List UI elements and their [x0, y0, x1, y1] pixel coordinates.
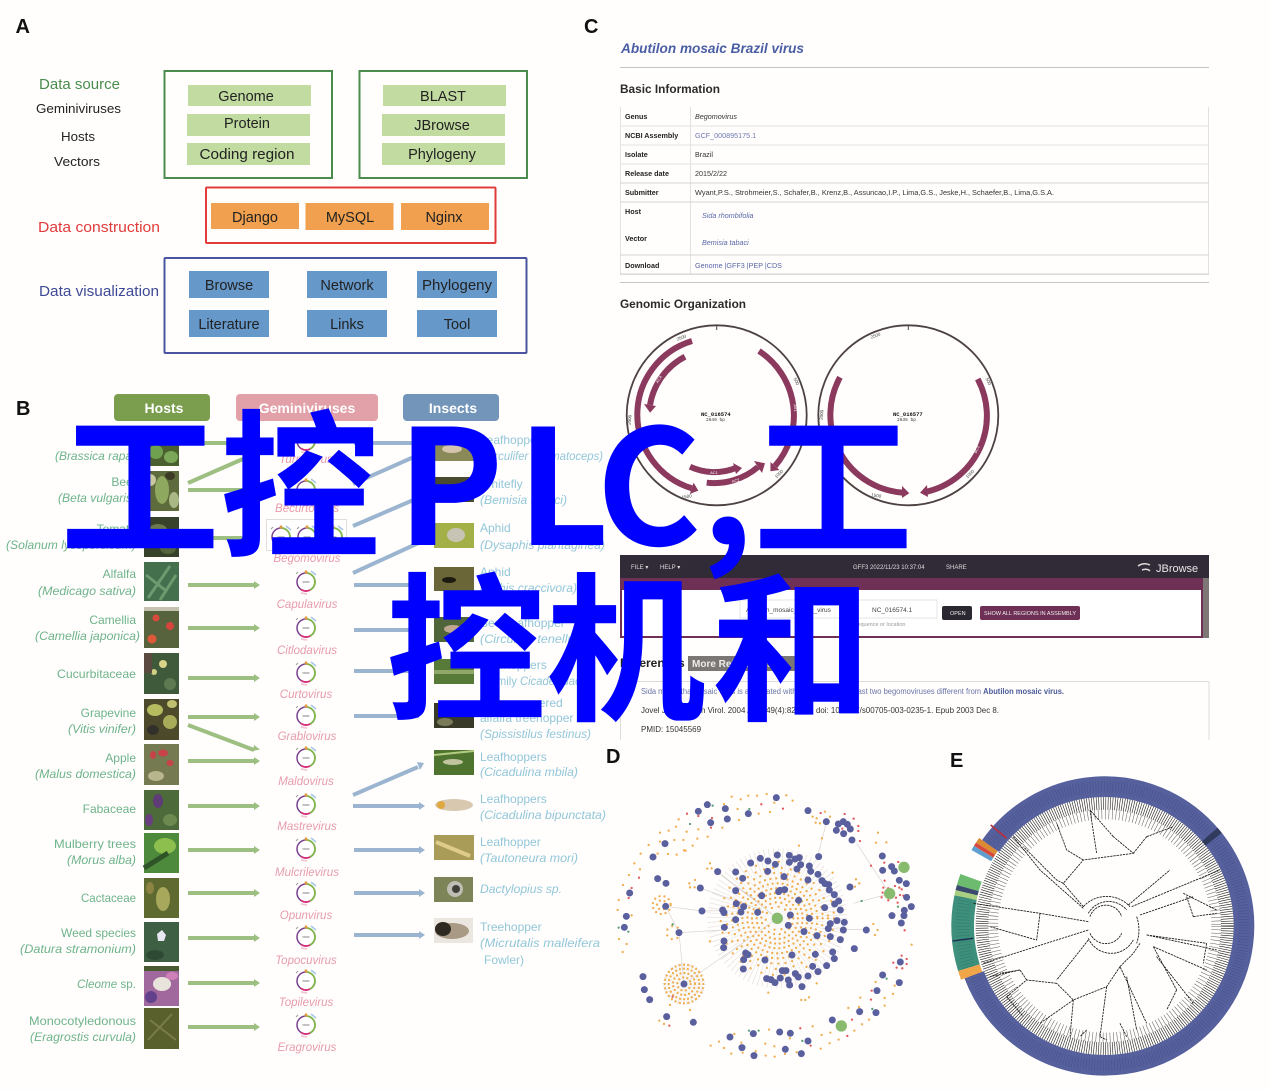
tree branches: [973, 810, 1220, 1040]
insect labels: Fowler): [484, 953, 524, 967]
host labels: Grapevine: [81, 706, 136, 720]
watermark line 2: 控机和: [386, 523, 872, 755]
host labels: Cleome sp.: [77, 977, 136, 991]
references section: PMID: 15045569: [641, 725, 702, 734]
host labels: Monocotyledonous: [29, 1014, 136, 1028]
host labels: (Eragrostis curvula): [30, 1030, 136, 1044]
red nodes: [629, 804, 907, 1046]
host labels: (Morus alba): [67, 853, 136, 867]
column header: Insects: [403, 394, 499, 421]
host labels: Beet: [111, 475, 137, 489]
insect labels: Leafhopper: [480, 433, 541, 447]
insect labels: (Circulifer tenellus): [480, 632, 585, 646]
basic information table: Isolate: [625, 150, 648, 159]
insect labels: Three-cornered: [480, 696, 563, 710]
genome map: NC_016574: 1000: [774, 468, 785, 479]
basic information table: Genus: [625, 112, 647, 121]
data source labels: [36, 76, 122, 169]
geminivirus genus names: Turnovirus: [279, 454, 333, 466]
data source box: genomic data: Genome: [218, 89, 274, 105]
insect labels: Leafhoppers: [480, 750, 547, 764]
geminivirus genus names: Becurtovirus: [275, 503, 339, 515]
host labels: Camellia: [89, 613, 136, 627]
title rule: [620, 67, 1209, 68]
insect labels: Leafhoppers: [480, 792, 547, 806]
host labels: Tomato: [97, 522, 136, 536]
genome map: NC_016577: NC_016577: [893, 411, 923, 418]
insect labels: (Tautoneura mori): [480, 851, 578, 865]
basic information heading: Basic Information: [620, 82, 720, 96]
host photos: [144, 437, 179, 1049]
insect labels: Beet leafhopper: [480, 616, 565, 630]
geminivirus genus names: Begomovirus: [273, 553, 341, 565]
JBrowse viewer screenshot: SHOW ALL REGIONS IN ASSEMBLY: [984, 611, 1077, 617]
data construction box: MySQL: [326, 210, 374, 226]
geminivirus genus names: Capulavirus: [277, 599, 338, 611]
insect photos: [434, 440, 474, 943]
JBrowse viewer screenshot: Abutilon_mosaic_Brazil_virus: [746, 607, 832, 614]
geminivirus genus names: Mulcrilevirus: [275, 867, 339, 879]
insect labels: (Dysaphis plantaginea): [480, 538, 605, 552]
column header: Insects: Insects: [429, 400, 477, 416]
host labels: Fabaceae: [83, 802, 136, 816]
JBrowse viewer screenshot: GFF3 2022/11/23 10:37:04: [853, 565, 925, 571]
geminivirus genus names: Mastrevirus: [277, 821, 337, 833]
JBrowse viewer screenshot: HELP ▾: [660, 565, 680, 571]
geminivirus genus names: [273, 454, 341, 1054]
host labels: (Camellia japonica): [35, 629, 140, 643]
green host hub nodes: [772, 862, 910, 1032]
JBrowse viewer screenshot: NC_016574.1: [872, 607, 912, 614]
data visualization box: Browse: [205, 278, 253, 294]
host labels: (Solanum lycopersicum): [6, 538, 136, 552]
host labels: (Datura stramonium): [20, 942, 136, 956]
orange leaf nodes around hubs: [653, 862, 834, 1003]
data source labels: Geminiviruses: [36, 101, 122, 116]
host labels: (Brassica rapa): [55, 449, 136, 463]
basic information table: Bemisia tabaci: [702, 238, 749, 247]
host labels: [6, 433, 140, 1044]
column header: Hosts: [114, 394, 210, 421]
green and teal small nodes: [619, 806, 898, 1041]
insect labels: Dactylopius sp.: [480, 882, 562, 896]
genome map: NC_016577: 1000: [965, 468, 976, 479]
insect labels: Whitefly: [480, 477, 523, 491]
data source labels: Vectors: [54, 154, 101, 169]
basic information table: NCBI Assembly: [625, 131, 678, 140]
basic information table: Brazil: [695, 150, 713, 159]
references section: [620, 656, 1209, 740]
data visualization label: Data visualization: [39, 283, 159, 300]
panel E: circular phylogenetic tree: [953, 787, 1244, 1065]
panel D: interaction network: [618, 794, 915, 1059]
genome map: NC_016574: AV1: [793, 404, 798, 412]
insect labels: Leafhopper: [480, 835, 541, 849]
dark ticks on ring: [974, 787, 1244, 1065]
genome map: NC_016574: 1500: [681, 493, 693, 500]
green arrows: hosts to viruses: [188, 443, 260, 1031]
data source box: tools: [360, 71, 527, 178]
insect labels: alfalfa treehopper: [480, 711, 573, 725]
data source box: genomic data: [164, 71, 332, 178]
insect labels: Treehopper: [480, 920, 542, 934]
data source labels: Hosts: [61, 129, 96, 144]
virus title: Abutilon mosaic Brazil virus: [620, 40, 804, 56]
panel letter E: E: [950, 750, 963, 772]
insect labels: (Aphis craccivora): [480, 581, 577, 595]
orange outer nodes: [618, 794, 912, 1057]
host labels: Mulberry trees: [54, 837, 136, 851]
panel letter A: A: [16, 16, 30, 38]
basic information table: GCF_000895175.1: [695, 131, 756, 140]
JBrowse viewer screenshot: SHARE: [946, 565, 967, 571]
panel C: virus detail page: [584, 16, 1209, 740]
genome map: NC_016577: 1500: [871, 492, 882, 499]
data construction box: Nginx: [425, 210, 463, 226]
data construction label: Data construction: [38, 219, 160, 236]
genome map: NC_016577: [818, 325, 998, 505]
host labels: (Medicago sativa): [38, 584, 136, 598]
genome map: NC_016574: AC1: [710, 470, 719, 475]
insect labels: (Micrutalis malleifera: [480, 936, 600, 950]
basic information table: Vector: [625, 234, 647, 243]
data construction box: Django: [232, 210, 278, 226]
genome map: NC_016574: 2500: [676, 333, 687, 342]
basic information table: Submitter: [625, 188, 659, 197]
blue arrows: viruses to insects: [353, 443, 425, 939]
insect labels: (Spissistilus festinus): [480, 727, 591, 741]
host labels: (Vitis vinifer): [68, 722, 136, 736]
table rule: [620, 282, 1209, 283]
genome map: NC_016574: 2649 bp: [706, 417, 725, 423]
geminivirus genus names: Curtovirus: [280, 689, 332, 701]
geminivirus genome maps: [266, 430, 346, 1037]
main blue annotation ring: [974, 787, 1244, 1065]
host labels: Weed species: [61, 926, 136, 940]
geminivirus genus names: Citlodavirus: [277, 645, 337, 657]
geminivirus genus names: Topilevirus: [279, 997, 334, 1009]
data source box: tools: Phylogeny: [408, 147, 477, 163]
JBrowse viewer screenshot: [620, 555, 1209, 638]
host labels: Cucurbitaceae: [57, 667, 136, 681]
basic information table: Sida rhombifolia: [702, 211, 754, 220]
data visualization box: Links: [330, 317, 364, 333]
host labels: (Beta vulgaris): [58, 491, 136, 505]
references section: Sida micrantha mosaic virus is associated with a complex of at least two begomoviruses different from Abutilon mosaic virus.: [641, 687, 1064, 696]
data visualization box: Literature: [198, 317, 260, 333]
genome map: NC_016577: 2500: [870, 331, 882, 340]
insect labels: [480, 433, 606, 967]
genome map: NC_016574: NC_016574: [701, 411, 731, 418]
geminivirus genus names: Eragrovirus: [278, 1042, 337, 1054]
JBrowse viewer screenshot: Enter sequence or location: [840, 622, 905, 628]
genome map: NC_016574: AC2: [731, 477, 741, 484]
data source labels: Data source: [39, 76, 120, 93]
genome map: NC_016574: 500: [793, 377, 800, 386]
blue virus nodes: [621, 794, 915, 1059]
references section: Jovel J, et al. Arch Virol. 2004 Apr;149(4):829-41. doi: 10.1007/s00705-003-0235-1. Epub 2003 Dec 8.: [641, 706, 999, 715]
geminivirus genus names: Topocuvirus: [275, 955, 337, 967]
data construction box: [206, 188, 496, 243]
basic information table: Begomovirus: [695, 112, 737, 121]
panel A: database architecture: [16, 16, 527, 353]
host labels: Cactaceae: [81, 891, 136, 905]
coloured clade bands: [953, 825, 1214, 976]
JBrowse viewer screenshot: JBrowse: [1156, 563, 1198, 575]
insect labels: (Family Cicadellidae): [480, 674, 585, 688]
genome map: NC_016574: 2000: [627, 414, 632, 425]
genome map: NC_016577: 2635 bp: [897, 417, 916, 423]
JBrowse viewer screenshot: FILE ▾: [631, 565, 648, 571]
data source box: genomic data: Protein: [224, 116, 270, 132]
host labels: Apple: [105, 751, 136, 765]
insect labels: (Circulifer haematoceps): [480, 449, 603, 463]
basic information table: Download: [625, 261, 659, 270]
data visualization box: Tool: [444, 317, 470, 333]
column header: Geminiviruses: Geminiviruses: [259, 400, 355, 416]
references section: References: [620, 656, 685, 670]
data source box: tools: JBrowse: [414, 118, 470, 134]
host labels: Turnip: [102, 433, 136, 447]
data source box: tools: BLAST: [420, 89, 466, 105]
watermark line 1: 工控PLC,工: [60, 360, 913, 592]
genomic organization heading: Genomic Organization: [620, 297, 746, 311]
basic information table: Host: [625, 207, 642, 216]
network edges: [666, 822, 890, 995]
genome map: NC_016577: BC1: [973, 444, 981, 454]
insect labels: (Cicadulina bipunctata): [480, 808, 606, 822]
panel letter C: C: [584, 16, 598, 38]
panel B: hosts, geminiviruses, insects: [6, 394, 606, 1054]
data visualization box: Phylogeny: [422, 278, 493, 294]
insect labels: Leafhoppers: [480, 658, 547, 672]
geminivirus genus names: Maldovirus: [278, 776, 334, 788]
basic information table: Wyant,P.S., Strohmeier,S., Schafer,B., Krenz,B., Assuncao,I.P., Lima,G.S., Jeske,H., Schaefer,B., Lima,G.S.A.: [695, 188, 1054, 197]
genome map: NC_016577: 2000: [819, 409, 824, 420]
column header: Hosts: Hosts: [145, 400, 184, 416]
data visualization box: [164, 258, 526, 353]
host labels: (Malus domestica): [35, 767, 136, 781]
JBrowse viewer screenshot: OPEN: [950, 611, 966, 617]
insect labels: Aphid: [480, 521, 511, 535]
data visualization box: Network: [320, 278, 374, 294]
basic information table: 2015/2/22: [695, 169, 727, 178]
genome map: NC_016577: 500: [985, 377, 992, 386]
geminivirus genus names: Grablovirus: [278, 731, 337, 743]
genome map: NC_016574: AC4: [655, 374, 663, 384]
basic information table: Release date: [625, 169, 669, 178]
insect labels: (Bemisia tabaci): [480, 493, 567, 507]
basic information table: Genome |GFF3 |PEP |CDS: [695, 261, 782, 270]
panel letter B: B: [16, 398, 30, 420]
data source box: genomic data: Coding region: [200, 147, 294, 163]
host labels: Alfalfa: [103, 567, 136, 581]
genome map: NC_016574: [627, 325, 807, 505]
tree leaves fringe: [982, 803, 1227, 1049]
panel letter D: D: [606, 746, 620, 768]
basic information table: [620, 107, 1209, 274]
column header: Geminiviruses: [236, 394, 378, 421]
references section: More References: [692, 659, 773, 670]
insect labels: (Cicadulina mbila): [480, 765, 578, 779]
insect labels: Aphid: [480, 565, 511, 579]
geminivirus genus names: Opunvirus: [280, 910, 332, 922]
